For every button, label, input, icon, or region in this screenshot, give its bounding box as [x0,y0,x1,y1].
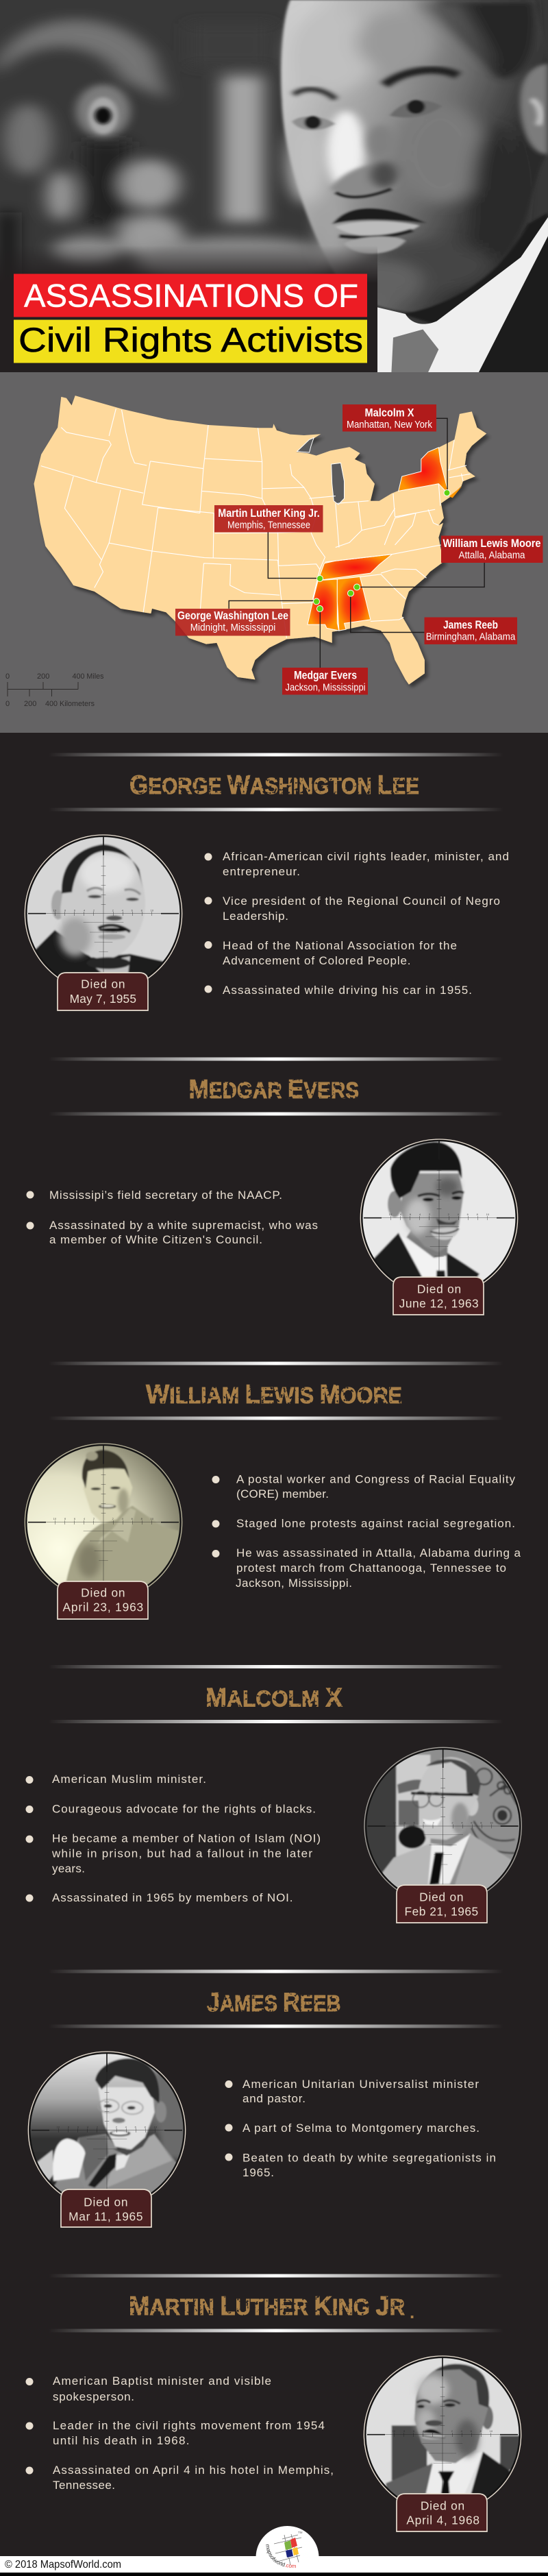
scale bar [5,672,104,708]
bullet list: He became a member of Nation of Islam (NOI) [52,1832,321,1845]
callout: Malcolm X: Malcolm X [364,406,414,420]
logo: mapsofworld.com [266,2544,296,2568]
scale bar: 400 Kilometers [45,700,95,708]
panel: Medgar Evers [26,1057,521,1315]
callout: William Lewis Moore [441,536,543,563]
portrait: 2 4 6 8 10 [448,1213,490,1216]
date badge: May 7, 1955 [70,992,136,1006]
bullet list [212,1472,521,1590]
date badge: April 4, 1968 [406,2514,480,2527]
bullet list [26,2374,334,2492]
date badge: June 12, 1963 [399,1297,479,1311]
portrait: 2 4 6 8 10 [451,1821,494,1824]
bullet list: (CORE) member. [236,1487,329,1500]
bullet list [26,1773,321,1904]
callout: Martin Luther King Jr. [214,505,323,532]
copyright: © 2018 MapsofWorld.com [5,2559,121,2571]
callout: William Lewis Moore: Attalla, Alabama [459,550,525,561]
scale bar: 0 [5,672,10,681]
callout: Martin Luther King Jr.: Memphis, Tennessee [227,520,310,531]
bullet list: spokesperson. [53,2390,134,2403]
collar and suit [371,217,548,372]
date badge: April 23, 1963 [62,1601,143,1614]
location dots [314,489,450,611]
portrait: 2 4 6 8 10 [451,2429,493,2433]
bullet list: Beaten to death by white segregationists in [242,2151,496,2165]
date badge [397,1885,487,1923]
heading: GEORGE WASHINGTON LEE [129,770,419,800]
bullet list: 1965. [242,2166,274,2179]
bullet list: American Unitarian Universalist minister [242,2078,479,2091]
date badge: Died on [81,1585,125,1599]
date badge [393,1277,484,1315]
bullet list: and pastor. [242,2092,306,2105]
bullet list: Leadership. [223,910,288,923]
bullet list: Vice president of the Regional Council of Negro [223,895,500,908]
portrait: 10 8 6 4 2 [57,2125,99,2128]
date badge [58,973,148,1010]
panel: William Lewis Moore [21,1361,521,1619]
callout: George Washington Lee: George Washington Lee [177,609,288,622]
bullet list [26,1189,318,1246]
bullet list: a member of White Citizen's Council. [49,1233,262,1246]
date badge: Died on [417,1282,461,1296]
bullet list: years. [52,1862,85,1875]
state borders [41,409,470,638]
title: yellow banner: Civil Rights Activists [18,321,363,359]
hero photo banner [0,0,548,372]
panel: Martin Luther King Jr. [26,2274,524,2531]
bullet list [225,2078,496,2179]
map of the United States [34,396,486,685]
portrait [356,1134,521,1315]
logo [256,2526,319,2568]
panel: George Washington Lee [21,753,509,1010]
scale bar: 200 [24,700,36,708]
scale bar: 200 [37,672,49,681]
heading period: . [410,2302,414,2322]
scale bar: 0 [5,700,10,708]
scale bar: 400 Miles [73,672,104,681]
date badge [58,1581,148,1619]
callout: James Reeb: Birmingham, Alabama [426,632,516,643]
panel: James Reeb [24,1970,503,2227]
bullet list: Leader in the civil rights movement from 1954 [53,2419,325,2432]
leader lines [229,418,484,668]
panel: map of assassination locations [0,372,548,733]
callout: James Reeb [425,617,517,644]
bullet list: Assassinated on April 4 in his hotel in Memphis, [53,2464,334,2477]
bullet list: Head of the National Association for the [223,939,457,952]
heading: MALCOLM X [206,1684,342,1712]
bullet list [204,850,509,997]
portrait [360,1741,524,1923]
bullet list: Advancement of Colored People. [223,954,411,967]
callout: Martin Luther King Jr.: Martin Luther King Jr. [218,507,320,520]
date badge: Died on [81,977,125,991]
portrait of Martin Luther King Jr. in hero [281,0,548,330]
portrait: 2 4 6 8 10 [112,908,154,912]
highlighted states [308,448,462,631]
bullet list: American Muslim minister. [52,1773,206,1786]
portrait [360,2351,524,2531]
heading: WILLIAM LEWIS MOORE [146,1380,402,1409]
portrait: 10 8 6 4 2 [393,2429,434,2433]
portrait: 10 8 6 4 2 [53,1517,95,1520]
bullet list: protest march from Chattanooga, Tennessee to [236,1562,506,1575]
heading: JAMES REEB [207,1988,341,2017]
bullet list: Courageous advocate for the rights of blacks. [52,1803,316,1815]
heading: MARTIN LUTHER KING JR [129,2292,405,2321]
date badge: Died on [421,2499,464,2512]
callout: Medgar Evers: Medgar Evers [294,669,357,681]
callout: George Washington Lee [175,609,290,636]
callout: George Washington Lee: Midnight, Mississippi [190,622,275,633]
bullet list: African-American civil rights leader, minister, and [223,850,509,863]
callout: Medgar Evers: Jackson, Mississippi [285,683,366,694]
footer [0,2526,548,2576]
heading: MEDGAR EVERS [189,1075,359,1104]
panel: Malcolm X [26,1665,524,1923]
bullet list: Tennessee. [53,2479,115,2492]
callout: James Reeb: James Reeb [443,618,498,631]
portrait: 2 4 6 8 10 [116,2125,158,2128]
bullet list: Assassinated by a white supremacist, who was [49,1219,318,1232]
bullet list: American Baptist minister and visible [53,2374,271,2387]
date badge [397,2494,487,2531]
bullet list: Staged lone protests against racial segregation. [236,1517,515,1530]
portrait [24,2052,188,2227]
logo: TM [298,2531,303,2534]
bullet list: Assassinated while driving his car in 1955. [223,984,472,997]
bullet list: until his death in 1968. [53,2434,189,2447]
bullet list: while in prison, but had a fallout in the later [51,1847,312,1860]
date badge: Feb 21, 1965 [404,1905,478,1919]
bullet list: Assassinated in 1965 by members of NOI. [52,1891,293,1904]
date badge: Died on [419,1890,463,1904]
portrait [21,829,185,1010]
bullet list: entrepreneur. [223,865,300,878]
portrait: 10 8 6 4 2 [393,1821,435,1824]
callout: Medgar Evers [282,668,368,695]
portrait: 2 4 6 8 10 [112,1517,154,1520]
bullet list: Mississipi’s field secretary of the NAACP. [49,1189,282,1202]
bullet list: He was assassinated in Attalla, Alabama during a [236,1546,521,1559]
portrait [21,1439,185,1619]
portrait: 10 8 6 4 2 [389,1213,431,1216]
date badge [61,2189,151,2227]
portrait: 10 8 6 4 2 [53,908,95,912]
date badge: Mar 11, 1965 [68,2210,142,2224]
bullet list: Jackson, Mississippi. [236,1577,352,1590]
title: red banner: ASSASSINATIONS OF [24,277,358,314]
date badge: Died on [84,2195,127,2209]
callout: Malcolm X [342,404,436,432]
callout: Malcolm X: Manhattan, New York [347,420,433,430]
bullet list: A postal worker and Congress of Racial Equality [236,1472,515,1486]
bullet list: A part of Selma to Montgomery marches. [242,2122,480,2135]
blurred gun backdrop [0,0,548,324]
